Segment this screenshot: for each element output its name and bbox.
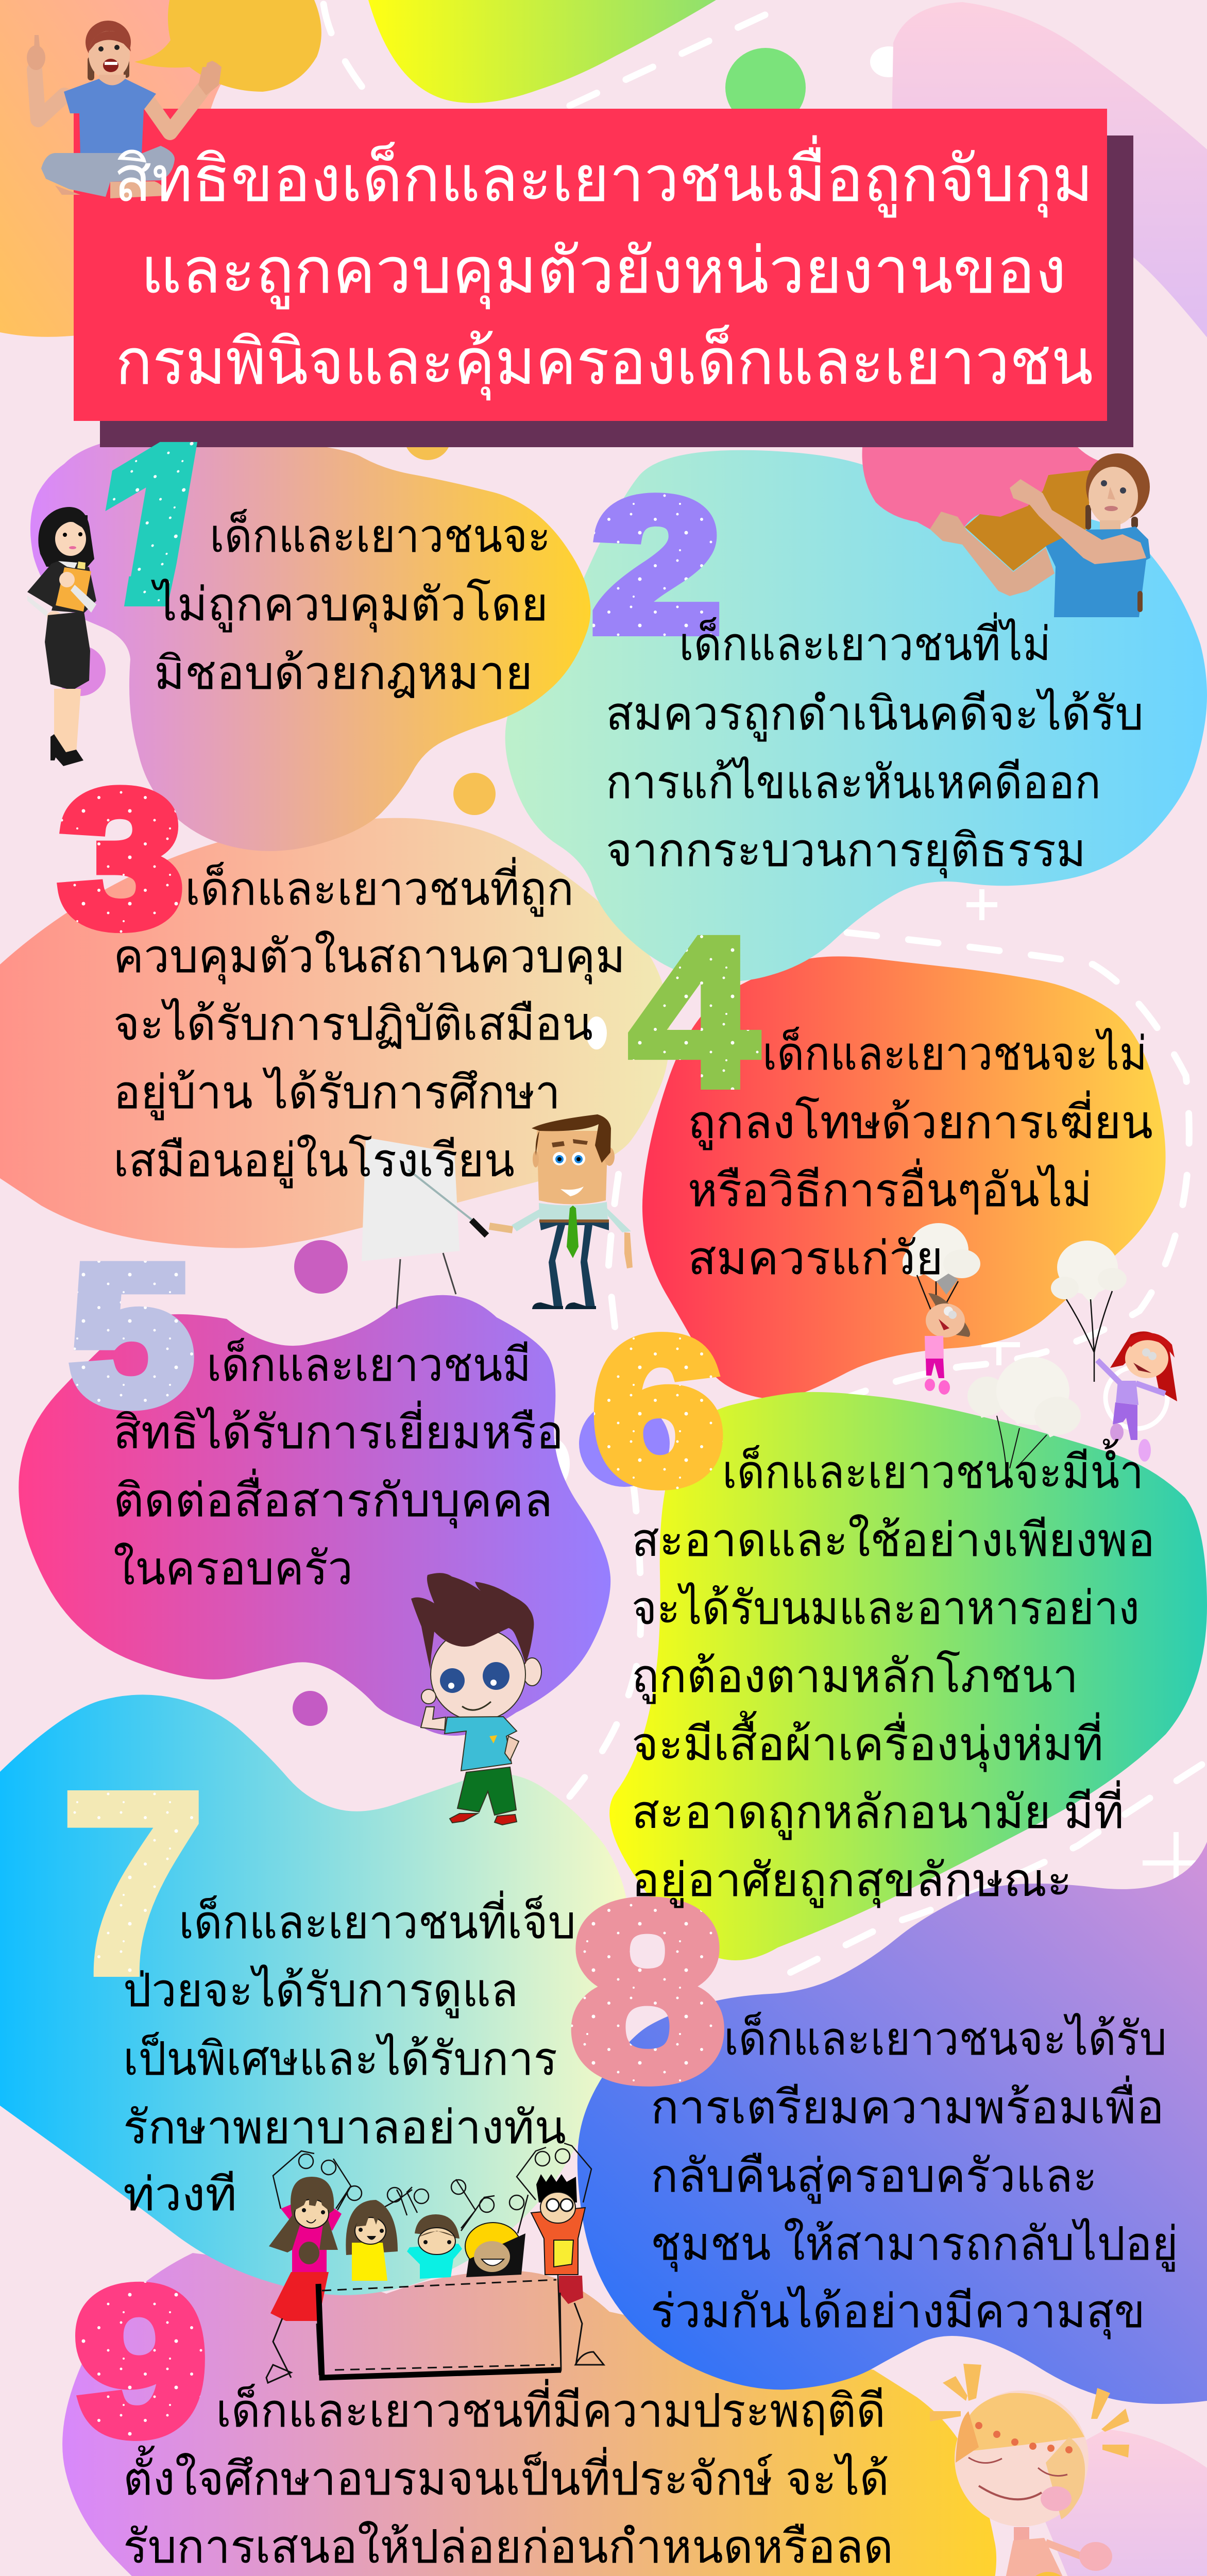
circle: green dot xyxy=(725,48,806,127)
blob: panel 7 background xyxy=(0,1694,629,2295)
text: right 2: การแก้ไขและหันเหคดีออก xyxy=(606,756,1101,808)
text: right 3 xyxy=(113,857,625,1189)
text: right 4: สมควรแก่วัย xyxy=(688,1233,943,1284)
text: right 4: เด็กและเยาวชนจะไม่ xyxy=(762,1026,1147,1080)
text: right 9 xyxy=(123,2379,893,2576)
illustration: girl pointing, top left xyxy=(27,21,222,198)
text: right 4: หรือวิธีการอื่นๆอันไม่ xyxy=(688,1158,1092,1216)
text: right 6: เด็กและเยาวชนจะมีน้ำ xyxy=(722,1439,1144,1498)
text: right 1: มิชอบด้วยกฎหมาย xyxy=(154,648,533,699)
title panel xyxy=(74,109,1107,421)
number 9: 9 xyxy=(75,2246,206,2476)
text: right 7: รักษาพยาบาลอย่างทัน xyxy=(123,2102,566,2154)
blob: panel 8 background xyxy=(577,1842,1207,2404)
text: right 2: เด็กและเยาวชนที่ไม่ xyxy=(679,612,1051,670)
text: right 6: จะมีเสื้อผ้าเครื่องนุ่งห่มที่ xyxy=(632,1711,1103,1772)
circle: purple dot behind woman xyxy=(55,646,106,696)
blob: panel 6 purple accent xyxy=(579,1400,670,1487)
blob: top-right pink xyxy=(891,2,1207,337)
text: right 6: ถูกต้องตามหลักโภชนา xyxy=(632,1650,1078,1704)
text: right 2: สมควรถูกดำเนินคดีจะได้รับ xyxy=(606,688,1144,742)
title text: และถูกควบคุมตัวยังหน่วยงานของ xyxy=(141,235,1066,310)
text: right 5: เด็กและเยาวชนมี xyxy=(207,1337,531,1391)
circle: small orange dot xyxy=(404,416,451,460)
text: right 5: ในครอบครัว xyxy=(113,1543,353,1595)
text: right 8: เด็กและเยาวชนจะได้รับ xyxy=(724,2011,1167,2065)
text: right 1 xyxy=(151,508,551,699)
text: right 7 xyxy=(123,1890,576,2221)
blob: top yellow-green xyxy=(368,0,716,103)
number 1: 1 xyxy=(72,399,240,655)
text: right 9: รับการเสนอให้ปล่อยก่อนกำหนดหรือลด xyxy=(123,2521,893,2573)
illustration: woman with book, panel 1 xyxy=(27,507,96,766)
blob: yellow speech bubble xyxy=(134,0,321,92)
blob: pink behind girl in panel 2 xyxy=(862,447,1104,529)
illustration: child with balloons, left xyxy=(903,1223,980,1395)
blob: panel 3 background xyxy=(0,818,670,1248)
number 8: 8 xyxy=(570,1852,725,2130)
blob: bottom-right pink behind doll xyxy=(1025,2429,1207,2576)
text: right 8 xyxy=(651,2011,1178,2340)
number 7: 7 xyxy=(60,1738,206,2028)
blob: panel 6 background xyxy=(609,1392,1207,1960)
illustration: group of children with board, panel 7/9 xyxy=(266,2143,604,2383)
text: right 6: จะได้รับนมและอาหารอย่าง xyxy=(632,1582,1140,1634)
text: right 4: ถูกลงโทษด้วยการเฆี่ยน xyxy=(688,1090,1153,1150)
text: right 5: สิทธิได้รับการเยี่ยมหรือ xyxy=(113,1400,564,1459)
number 4: 4 xyxy=(629,893,760,1131)
number 2: 2 xyxy=(593,461,720,669)
text: right 8: กลับคืนสู่ครอบครัวและ xyxy=(651,2150,1097,2204)
text: right 6 xyxy=(632,1439,1155,1908)
illustration: man presenting with board, panel 3 xyxy=(362,1114,633,1309)
text: right 1: ไม่ถูกควบคุมตัวโดย xyxy=(151,579,548,633)
circle: yellow dot xyxy=(453,773,496,815)
text: right 3: ควบคุมตัวในสถานควบคุม xyxy=(113,931,625,985)
illustration: cartoon boy, panel 5 xyxy=(411,1573,541,1825)
text: right 8: การเตรียมความพร้อมเพื่อ xyxy=(651,2075,1164,2133)
text: right 3: เด็กและเยาวชนที่ถูก xyxy=(185,857,574,917)
circle: magenta dot above panel 5 xyxy=(294,1240,348,1294)
blob: panel 2 background xyxy=(505,450,1207,981)
text: right 3: อยู่บ้าน ได้รับการศึกษา xyxy=(113,1066,560,1121)
illustration: girl holding board, panel 2 xyxy=(930,453,1150,617)
illustration: child with balloons, right xyxy=(1051,1241,1177,1462)
illustration: three balloons xyxy=(967,1357,1081,1468)
text: right 2: จากกระบวนการยุติธรรม xyxy=(606,825,1086,878)
blob: panel 9 background xyxy=(62,2253,996,2576)
text: right 8: ร่วมกันได้อย่างมีความสุข xyxy=(651,2285,1145,2340)
blob: panel 4 background xyxy=(642,956,1166,1399)
text: right 3: จะได้รับการปฏิบัติเสมือน xyxy=(113,998,593,1050)
illustration: watercolor doll, panel 9 xyxy=(930,2364,1129,2576)
blob: small white dot on panel 3 xyxy=(586,1016,607,1049)
text: right 7: ป่วยจะได้รับการดูแล xyxy=(123,1964,518,2019)
text: right 1: เด็กและเยาวชนจะ xyxy=(210,508,551,562)
number 6: 6 xyxy=(593,1297,724,1526)
text: right 5 xyxy=(113,1337,564,1595)
text: right 8: ชุมชน ให้สามารถกลับไปอยู่ xyxy=(651,2218,1178,2272)
text: right 9: เด็กและเยาวชนที่มีความประพฤติดี xyxy=(216,2379,886,2437)
blob: panel 1 background xyxy=(30,434,590,851)
text: right 7: ท่วงที xyxy=(123,2169,237,2221)
blob: panel 5 background xyxy=(19,1295,610,1736)
title text: สิทธิของเด็กและเยาวชนเมื่อถูกจับกุม xyxy=(114,135,1093,218)
text: right 2 xyxy=(606,612,1144,878)
text: right 6: สะอาดถูกหลักอนามัย มีที่ xyxy=(632,1780,1124,1840)
text: right 6: อยู่อาศัยถูกสุขลักษณะ xyxy=(632,1855,1072,1908)
text: right 7: เด็กและเยาวชนที่เจ็บ xyxy=(179,1890,576,1948)
blob: top-left orange xyxy=(0,0,227,337)
number 5: 5 xyxy=(71,1225,193,1444)
text: right 6: สะอาดและใช้อย่างเพียงพอ xyxy=(632,1515,1155,1566)
title text xyxy=(114,135,1093,401)
circle: magenta dot below panel 5 xyxy=(293,1691,328,1726)
text: right 3: เสมือนอยู่ในโรงเรียน xyxy=(113,1134,515,1189)
number 3: 3 xyxy=(60,753,182,965)
title text: กรมพินิจและคุ้มครองเด็กและเยาวชน xyxy=(115,324,1093,401)
text: right 4 xyxy=(688,1026,1153,1284)
title shadow xyxy=(100,135,1133,447)
text: right 9: ตั้งใจศึกษาอบรมจนเป็นที่ประจักษ์ จะได้ xyxy=(123,2446,889,2505)
text: right 7: เป็นพิเศษและได้รับการ xyxy=(123,2031,557,2085)
text: right 5: ติดต่อสื่อสารกับบุคคล xyxy=(113,1468,553,1529)
